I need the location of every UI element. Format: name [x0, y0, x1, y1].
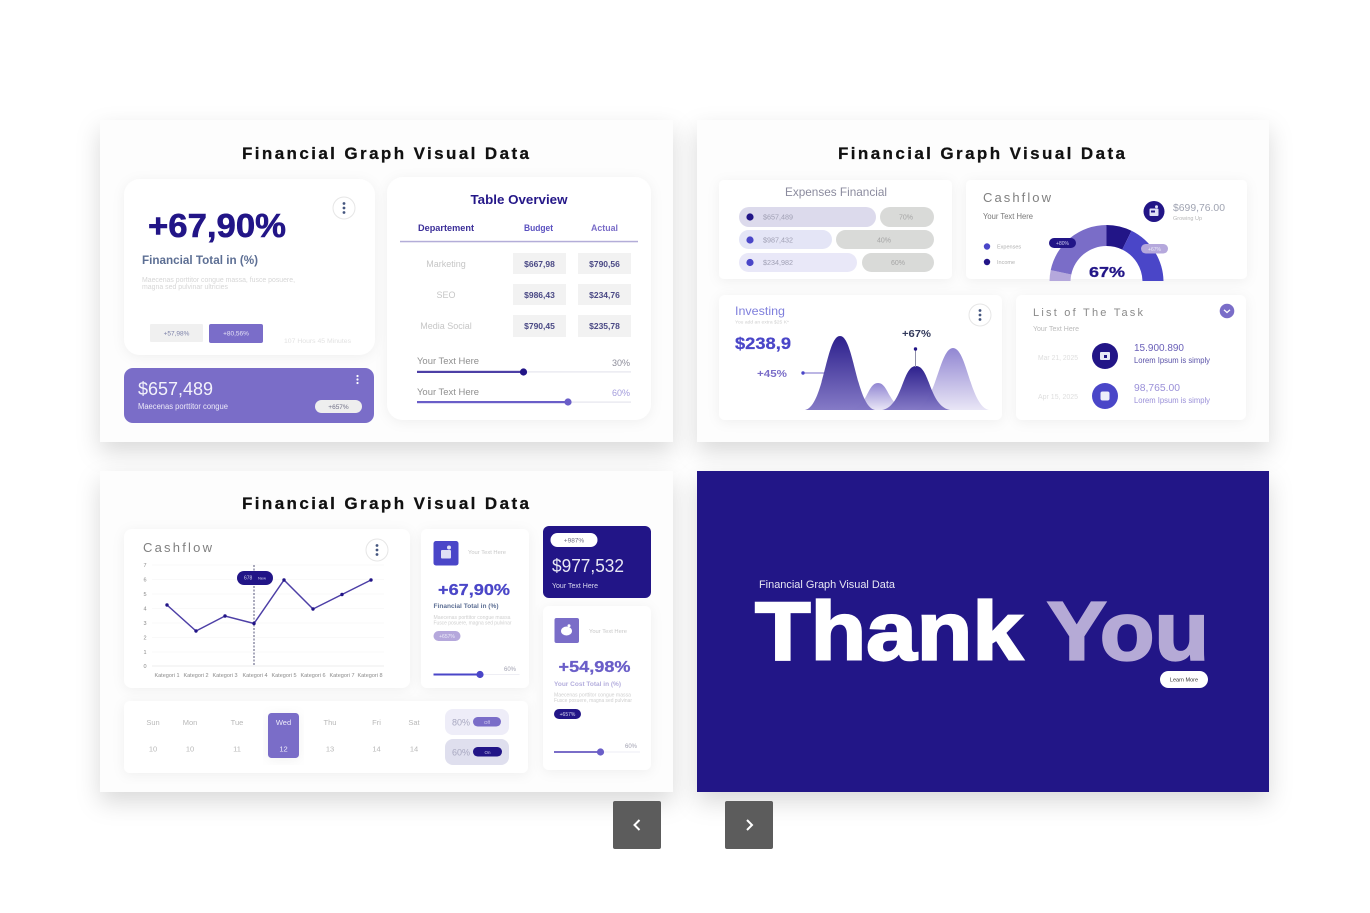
slider: 30%: Your Text Here [417, 356, 479, 366]
line chart: 5 [143, 592, 147, 598]
legend: Expenses [997, 244, 1021, 250]
heading: cashflow: Cashflow [143, 540, 213, 555]
bar row 3: $234,982 [763, 260, 793, 267]
icon: wallet circle [1144, 201, 1164, 222]
text: subtitle: You add an extra $25 K* [735, 320, 789, 324]
task row 1 [1038, 343, 1210, 369]
badge: light: +67% [1148, 247, 1162, 253]
legend [984, 243, 1021, 266]
icon: menu dots [333, 197, 355, 219]
table rows: SEO [436, 290, 456, 300]
badge: +657% [554, 709, 581, 719]
slider: 60%: 60% [612, 388, 630, 398]
weekday labels [146, 718, 421, 727]
badge: dark: +80% [1056, 241, 1070, 247]
task row 2: Lorem Ipsum is simply [1134, 396, 1210, 405]
value: $238,9: $238,9 [735, 334, 791, 353]
badge: dark [1049, 238, 1076, 248]
label: cost total: Your Cost Total in (%) [554, 682, 621, 688]
heading: investing: Investing [735, 304, 785, 318]
table header: Departement [418, 223, 474, 233]
badge: +67%: +657% [439, 634, 455, 640]
toggle: 80%: 80% [452, 718, 470, 728]
bar row 1 [739, 207, 934, 227]
heading: slide 3 title: Financial Graph Visual Data [242, 494, 530, 513]
dates: 14 [410, 744, 418, 754]
card: investing [719, 295, 1002, 420]
value: $699,76.00: Growing Up [1173, 216, 1202, 222]
callout: +45%: +45% [757, 369, 787, 380]
bar row 2: $987,432 [763, 238, 793, 244]
heading: list of the task: List of The Task [1033, 307, 1144, 319]
heading: table overview: Table Overview [470, 192, 568, 207]
line chart: 7 [143, 563, 147, 569]
card: cost total [543, 606, 651, 770]
bar row 2 [739, 230, 934, 249]
card: cashflow donut [980, 192, 1234, 281]
table rows: $234,76 [589, 290, 620, 300]
toggle: 80% [445, 709, 509, 735]
weekday labels: Mon [183, 718, 197, 727]
value: $699,76.00: $699,76.00 [1173, 202, 1225, 214]
line chart: 6 [143, 578, 147, 584]
card: dark balance [543, 526, 651, 598]
panel: slide 3 [100, 471, 673, 792]
toggle: 60% [445, 739, 509, 765]
button: learn more [1160, 671, 1208, 688]
heading: slide 1 title: Financial Graph Visual Data [242, 144, 530, 163]
line chart: Kategori 2 [183, 673, 209, 679]
text: subtitle: Your Text Here [1033, 326, 1079, 333]
button: next arrow [725, 801, 773, 849]
dates: 14 [372, 744, 381, 754]
heading: expenses: Expenses Financial [785, 185, 887, 199]
card: list of the task [1016, 295, 1246, 420]
weekday labels: Wed [276, 718, 291, 727]
callout: +67% [902, 329, 931, 367]
table rows: $790,45 [524, 321, 555, 331]
icon: chevron [1220, 304, 1234, 318]
table rows: $986,43 [524, 290, 555, 300]
slider: 60% [417, 387, 631, 406]
table rows: $235,78 [589, 321, 620, 331]
slider: 60%: Your Text Here [417, 387, 479, 397]
toggle: 80%: Off [484, 720, 491, 725]
value: $699,76.00 [1173, 202, 1225, 222]
task row 2 [1038, 383, 1210, 409]
button: previous arrow [613, 801, 661, 849]
dates: 12 [279, 744, 288, 754]
weekday labels: Sat [408, 718, 421, 727]
icon: wallet square [434, 541, 458, 566]
highlighted day [268, 713, 299, 758]
text: your text here: Your Text Here [468, 550, 506, 556]
icon: menu dots [366, 539, 388, 561]
slider: 30%: 30% [612, 358, 630, 368]
slider: 60% [434, 667, 520, 678]
dates: 10 [186, 744, 194, 754]
heading: cashflow: Cashflow [983, 190, 1052, 205]
text: description [142, 277, 295, 291]
card: cashflow line chart [124, 529, 410, 688]
badge: +657%: +657% [328, 404, 349, 411]
stat: 67%: 67% [1089, 264, 1125, 281]
heading: You: You [1047, 584, 1209, 678]
slider: 60%: 60% [625, 744, 638, 750]
stat: +67,90%: +67,90% [438, 582, 510, 599]
bar row 3 [739, 253, 934, 272]
card: calendar [124, 701, 528, 773]
badge: +987%: +987% [564, 538, 584, 544]
bar row 1: 70% [899, 214, 913, 222]
table rows: $790,56 [589, 259, 620, 269]
dates [149, 744, 418, 754]
button: +57,98%: +57,98% [164, 330, 190, 338]
legend: Income [997, 260, 1015, 266]
toggle: 60%: On [484, 750, 491, 755]
line chart: 4 [143, 606, 147, 612]
button: +80,56% [209, 324, 263, 343]
icon: piggy bank square [554, 618, 579, 643]
donut chart [1049, 225, 1164, 282]
line chart: Kategori 7 [329, 673, 355, 679]
line chart [143, 563, 384, 679]
icon: menu dots [356, 375, 359, 384]
text: your text here: Your Text Here [552, 581, 598, 590]
line chart: Kategori 6 [300, 673, 326, 679]
table rows: Media Social [420, 321, 472, 331]
slider: 60%: 60% [504, 667, 517, 673]
line chart: Kategori 5 [271, 673, 297, 679]
bar row 1: $657,489 [763, 214, 793, 222]
task row 2: 98,765.00 [1134, 383, 1180, 394]
table rows: Marketing [426, 259, 466, 269]
text: subtitle: Financial Graph Visual Data [759, 579, 896, 591]
callout: +45% [757, 369, 825, 380]
toggle: 60%: 60% [452, 748, 470, 758]
dates: 11 [233, 744, 241, 754]
weekday labels: Thu [324, 718, 336, 727]
value: $657,489: $657,489 [138, 379, 213, 399]
weekday labels: Fri [372, 718, 381, 727]
label: financial total: Financial Total in (%) [434, 604, 498, 610]
task row 1: Lorem Ipsum is simply [1134, 356, 1210, 365]
line chart: 3 [143, 621, 147, 627]
slider: 60% [554, 744, 640, 756]
text: description: magna sed pulvinar ultricies [142, 284, 228, 291]
card: table overview [387, 177, 651, 420]
slider: 30% [417, 356, 631, 376]
text: caption: Maecenas porttitor congue [138, 402, 229, 411]
text: description: Maecenas porttitor congue massa, fusce posuere, [142, 277, 295, 284]
table header: Budget [524, 223, 553, 233]
heading: Thank: Thank [755, 584, 1024, 678]
task row 1: Mar 21, 2025 [1038, 355, 1078, 362]
tooltip: 678 New [237, 571, 273, 585]
text: hours: 107 Hours 45 Minutes [284, 338, 352, 345]
text: your text here: Your Text Here [589, 629, 627, 635]
panel: slide 1 [100, 120, 673, 442]
badge: +67% [434, 631, 460, 641]
line chart: Kategori 4 [242, 673, 268, 679]
card: financial total [124, 179, 375, 355]
stat: +54,98%: +54,98% [558, 659, 630, 676]
line chart: Kategori 8 [357, 673, 383, 679]
dates: 10 [149, 744, 157, 754]
label: financial total: Financial Total in (%) [142, 255, 258, 267]
icon: menu dots [969, 304, 991, 326]
heading: slide 2 title: Financial Graph Visual Data [838, 144, 1126, 163]
text: description: Maecenas porttitor congue massa [554, 692, 631, 698]
badge: +657% [315, 400, 362, 413]
dates: 13 [326, 744, 334, 754]
table header: Actual [591, 223, 618, 233]
text: description [434, 615, 512, 626]
card: purple balance [124, 368, 374, 423]
line chart: 1 [143, 650, 147, 656]
task row 2: Apr 15, 2025 [1038, 394, 1078, 401]
callout: +67%: +67% [902, 329, 931, 340]
button: +57,98% [150, 324, 203, 342]
panel: slide 2 [697, 120, 1269, 442]
panel: thank you slide [697, 471, 1269, 792]
text: description: Fusce posuere, magna sed pulvinar [434, 620, 512, 626]
line chart: Kategori 1 [154, 673, 180, 679]
button: learn more: Learn More [1170, 678, 1198, 684]
button: +80,56%: +80,56% [223, 330, 249, 338]
line chart: Kategori 3 [212, 673, 238, 679]
weekday labels: Tue [231, 718, 243, 727]
bar row 2: 40% [877, 238, 891, 244]
table rows: $667,98 [524, 259, 555, 269]
text: subtitle: Your Text Here [983, 212, 1034, 221]
badge: light [1141, 244, 1168, 254]
line chart: 2 [143, 636, 147, 642]
tooltip: 678 New: New [258, 576, 266, 580]
text: description: Maecenas porttitor congue massa [434, 615, 511, 621]
badge: +657%: +657% [560, 712, 576, 718]
text: description [554, 692, 632, 704]
area chart [805, 336, 989, 410]
text: description: Fusce posuere, magna sed pulvinar [554, 698, 632, 704]
line chart: 0 [143, 664, 147, 670]
value: $977,532: $977,532 [552, 556, 624, 576]
table rows [420, 253, 631, 337]
card: financial total small [421, 529, 529, 688]
table header [418, 223, 618, 233]
card: expenses financial [719, 180, 952, 279]
task row 1: 15.900.890 [1134, 343, 1184, 354]
weekday labels: Sun [146, 718, 160, 727]
tooltip: 678 New: 678 [244, 576, 253, 582]
stat: +67,90%: +67,90% [148, 207, 286, 244]
bar row 3: 60% [891, 260, 905, 267]
